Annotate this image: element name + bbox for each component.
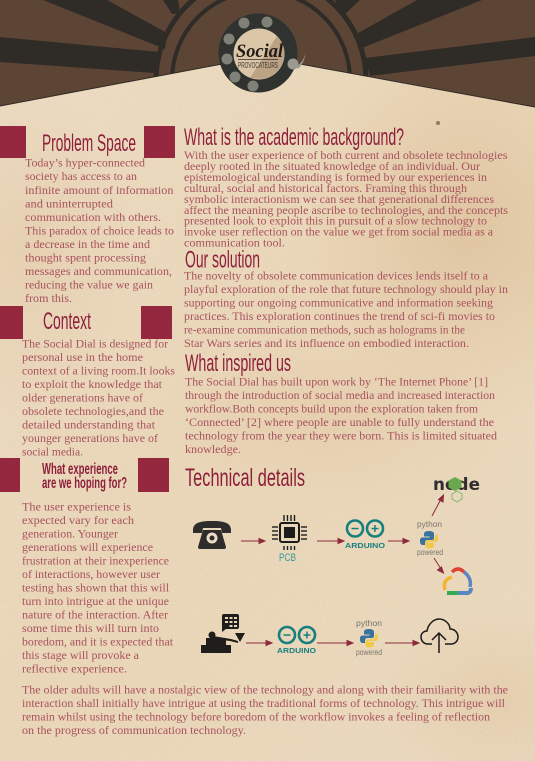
text: what experience: reflective experience. [22,662,127,676]
icon: PCB chip [272,515,307,564]
icon: telegraph with speech bubble [201,614,245,653]
text: academic background: With the user experience of both current and obsolete technologies [184,149,508,162]
text: academic background: epistemological understanding is formed by our experiences in [184,171,487,184]
text: academic background: presented look to exploit this in pursuit of a slow technology to [184,215,487,228]
text: context: obsolete technologies,and the [22,405,164,418]
arrow [246,640,272,646]
text: problem space: and uninterrupted [25,197,113,210]
arrow: to cloud [434,558,444,573]
heading: our solution: Our solution [185,247,260,274]
text: what experience: some time this will turn into [22,622,159,635]
icon: PCB chip: PCB [279,552,296,564]
icon: python powered [356,619,382,657]
heading: technical details: Technical details [185,464,305,492]
arrow: to node [432,495,444,516]
panel: our solution [184,247,508,350]
text: older adults paragraph: The older adults will have a nostalgic view of the technology and along with their familiarity with the [22,684,508,696]
text: context: younger generations have of [22,432,158,445]
text: problem space: thought spent processing [25,251,146,264]
text: context: to exploit the knowledge that [22,378,163,391]
text: problem space: society has access to an [25,170,137,183]
text: what experience: The user experience is [22,500,131,514]
text: context [22,338,175,459]
heading: problem space: Problem Space [42,130,136,157]
arrow [241,538,265,544]
heading: what inspired us: What inspired us [185,350,291,377]
panel: context [0,306,175,459]
heading: context: Context [43,308,91,335]
text: context: personal use in the home [22,351,143,364]
text: academic background: symbolic interactionism we can see that generational differences [184,193,495,206]
text: what experience: frustration at their inexperience [22,554,169,568]
icon: cloud upload [421,619,458,653]
text: what inspired us: through the introduction of social media and increased interaction [185,389,495,402]
text: what experience [22,500,174,676]
heading: what experience: What experience [42,461,118,478]
icon: python powered: powered [356,648,382,657]
icon: node js: node [433,475,480,495]
arrow [317,538,344,544]
text: context: detailed understanding that [22,419,156,432]
text: context: context of a living room.It looks [22,365,175,378]
text: problem space: Today’s hyper-connected [25,157,145,170]
text: problem space: from this. [25,292,72,305]
logo: Social Provocateurs dial: Social [236,41,284,62]
text: academic background: deeply rooted in the situated knowledge of an individual. Our [184,160,480,173]
text: our solution [184,269,508,350]
logo: Social Provocateurs dial [218,14,305,92]
text: what experience: boredom, and it is expected that [22,636,174,648]
text: what experience: this stage will provoke a [22,649,139,662]
logo: Social Provocateurs dial: PROVOCATEURS [238,60,278,70]
text: older adults paragraph: remain whilst using the technology before boredom of the workflow invokes a feeling of reflection [22,710,490,724]
text: what inspired us: workflow.Both concepts build upon the exploration taken from [185,402,478,416]
text: what experience: generations will experience [22,541,153,554]
panel: academic background [184,124,508,250]
text: our solution: practices. This exploration continues the trend of sci-fi movies to [184,310,495,323]
text: problem space: infinite amount of information [25,184,174,197]
text: problem space: a decrease in the time and [25,238,150,251]
text: context: older generations have of [22,392,143,405]
text: older adults paragraph: on the progress of communication technology. [22,724,246,737]
text: our solution: The novelty of obsolete communication devices lends itself to a [184,269,488,282]
text: our solution: playful exploration of the role that future technology should play in [184,283,508,296]
icon: python powered [417,520,443,557]
text: academic background: cultural, social and historical factors. Framing this through [184,182,467,195]
text: context: social media. [22,446,83,459]
panel: what experience are we hoping for [0,458,174,676]
text: what inspired us: ‘Connected’ [2] where people are unable to fully understand the [185,416,494,429]
text: academic background: invoke user reflection on the value we get from social media as a [184,226,493,239]
header banner with sunburst [0,0,535,108]
icon: python powered: python [417,520,442,529]
text: what experience: expected vary for each [22,514,134,527]
text: older adults paragraph: interaction shall initially have intrigue at using the traditional forms of technology. This intrigue will [22,697,505,710]
text: our solution: supporting our ongoing communicative and information seeking [184,296,493,309]
sunburst rays [0,0,535,76]
arrow [388,538,409,544]
arrow [385,640,419,646]
arrow [317,640,353,646]
icon: python powered: python [356,619,382,628]
icon: arduino logo: ARDUINO [345,541,385,550]
text: academic background: affect the meaning people ascribe to technologies, and the concepts [184,204,508,217]
panel: what inspired us [185,350,497,456]
text: problem space: reducing the value we gain [25,278,153,292]
text: our solution: Star Wars series and its influence on embodied interaction. [184,337,469,350]
text: what experience: of interactions, however user [22,568,160,581]
heading: what experience: are we hoping for? [42,475,127,492]
icon: arduino logo: ARDUINO [277,646,316,655]
text: older adults paragraph [22,684,508,737]
text: problem space: communication with others. [25,211,161,224]
text: problem space [25,157,174,305]
text: problem space: messages and communication, [25,265,172,278]
icon: arduino logo [345,520,385,550]
text: what inspired us: The Social Dial has built upon work by ‘The Internet Phone’ [1] [185,376,488,388]
text: context: The Social Dial is designed for [22,338,168,351]
diagram: top workflow [193,475,480,593]
icon: telephone [193,521,231,549]
text: what experience: generation. Younger [22,528,118,540]
diagram: bottom workflow [201,614,458,657]
icon: python powered: powered [417,548,443,557]
text: what experience: testing has shown that this will [22,582,169,594]
text: our solution: re-examine communication methods, such as holograms in the [184,323,465,336]
text: academic background: communication tool. [184,237,285,250]
heading: what experience [42,461,127,492]
text: what experience: turn into intrigue at the unique [22,595,169,608]
text: what experience: nature of the interaction. After [22,608,168,622]
text: academic background [184,149,508,250]
text: what inspired us [185,376,497,456]
panel: problem space [0,126,175,305]
icon: arduino logo [277,627,316,655]
text: what inspired us: technology from the year they were born. This is limited situated [185,430,497,442]
icon: google cloud [444,569,471,593]
text: what inspired us: knowledge. [185,443,241,456]
text: problem space: This paradox of choice leads to [25,224,174,237]
